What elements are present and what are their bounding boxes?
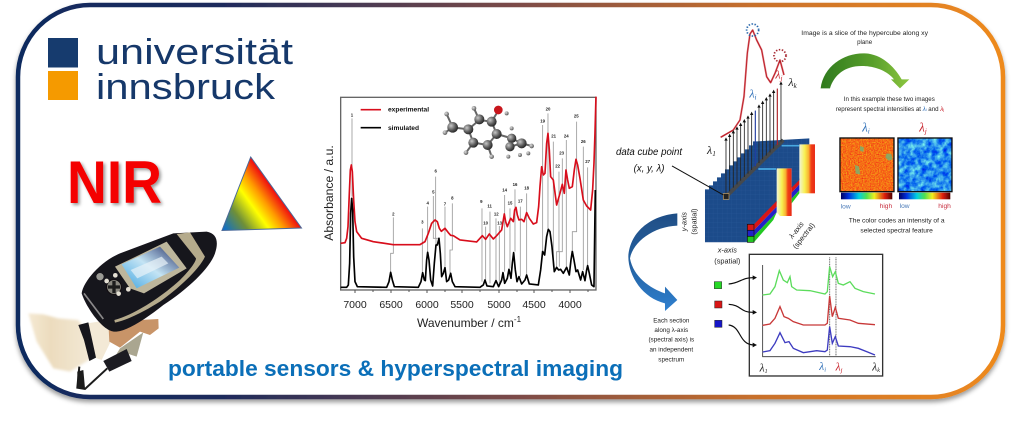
caption: example: In this example these two images [844,96,935,103]
front RGB bands [747,201,777,242]
keypad [96,273,131,296]
icon: spectrum triangle [222,157,302,230]
colour bar labels: low [841,204,851,211]
caption: sections: spectrum [658,356,684,363]
peak numbers: 5 [432,190,435,195]
wrist band [78,322,96,361]
peak numbers: 9 [480,199,483,204]
screen [122,247,179,288]
back slice RGB bands [792,178,799,203]
data cube point marker [723,194,729,199]
x tick labels: 5500 [450,299,474,311]
x tick labels: 6000 [415,299,439,311]
intensity map lambda j [898,138,952,192]
caption: colour codes: selected spectral feature [860,227,933,234]
map titles: j [924,127,927,136]
spectra axis labels: 1 [765,369,768,375]
peak numbers: 27 [585,159,591,164]
spectra axis labels [759,361,880,375]
hypercube diagram [616,24,952,251]
map titles: λ [862,121,868,135]
spectra axis labels: k [877,368,880,374]
swatch arrows [729,278,753,345]
bezel [115,242,187,293]
beige band [114,232,205,323]
legend [361,107,429,132]
spectra axis labels: λ [836,361,841,373]
peak numbers [351,107,591,226]
peak numbers: 10 [483,221,489,226]
lambda-axis label: (spectral) [791,221,817,251]
arrow heads [724,81,783,141]
simulated spectrum [341,190,595,287]
screen panel [131,257,168,278]
strap [77,367,107,389]
y-axis label: (spatial) [690,209,699,235]
map titles: i [868,127,870,136]
lambda labels: λ [788,75,794,89]
spectra section [628,213,883,376]
handle [115,332,143,357]
spectra axis labels: i [824,367,826,374]
lambda labels: j [780,73,783,82]
spectra axis labels: λ [819,361,824,373]
peak numbers: 14 [502,187,508,192]
blue curved arrow [628,213,677,311]
legend: experimental [388,107,429,114]
x tick labels: 6500 [379,299,403,311]
peak numbers: 12 [494,211,499,216]
lambda-axis label: λ-axis [786,220,806,241]
peak numbers: 7 [444,201,447,206]
plot frame [341,97,596,290]
chart: NIR spectrum [322,97,596,330]
spectrum above cube [721,30,784,137]
caption: slice: plane [857,39,873,46]
university logo: universität [96,31,293,72]
colour bar j [899,193,950,199]
caption: example [836,96,944,113]
cube body [705,138,809,242]
spectra panel [714,254,883,376]
spectra axis labels: j [840,367,843,374]
peak numbers: 20 [546,107,551,112]
peak numbers: 8 [451,195,454,200]
tagline: portable sensors & hyperspectral imaging [168,356,623,381]
lambda labels: i [755,92,757,101]
peak numbers: 3 [421,220,424,225]
peak numbers: 17 [518,199,523,204]
peak numbers: 24 [564,133,569,138]
peak numbers: 15 [508,201,513,206]
caption: sections: (spectral axis) is [648,337,694,344]
peak numbers: 2 [392,211,395,216]
intensity map lambda i [840,138,894,192]
peak numbers: 11 [487,204,493,209]
x axis title: Wavenumber / cm [417,316,514,330]
peak numbers: 18 [524,185,530,190]
caption: sections: an independent [650,347,693,354]
caption: colour codes [849,218,945,234]
NIR heading: NIR [67,149,162,216]
peak numbers: 13 [497,220,503,225]
lambda labels [706,67,798,158]
spectra axis labels: λ [760,362,765,374]
back colour strip [799,144,815,193]
lambda labels: λ [749,86,755,100]
caption: sections: Each section [653,317,690,324]
cyan slice edges [758,146,799,169]
peak numbers: 19 [540,118,546,123]
leader lines [352,113,588,283]
lambda i and j arrow highlights [754,111,757,166]
x ticks [355,290,588,293]
y-axis label: y-axis [680,212,689,232]
x tick labels: 5000 [487,299,511,311]
left edge bevel [84,293,103,319]
x axis title: -1 [514,315,522,324]
wavelength arrows [726,84,781,195]
peak numbers: 1 [351,112,354,117]
cuff [87,320,111,360]
caption: example: represent spectral intensities at λi and λj [836,106,944,113]
caption: sections: along λ-axis [654,327,688,334]
peak numbers: 22 [555,164,561,169]
x-axis label [714,245,740,266]
handle grip [103,349,132,372]
data cube point label: data cube point [616,147,683,158]
handheld NIR sensor photo [28,232,217,389]
colour bar labels: high [938,203,951,210]
peak numbers: 16 [513,182,518,187]
lambda labels: λ [775,67,781,81]
caption: colour codes: The color codes an intensity of a [849,218,945,225]
lambda labels: 1 [712,149,716,158]
x tick labels: 4500 [522,299,546,311]
peak numbers: 25 [574,113,579,118]
peak numbers: 4 [426,201,429,206]
x tick labels [343,299,582,311]
peak marker red [774,50,786,62]
cube in zoomed cube coordinates [705,138,815,242]
peak numbers: 6 [434,168,437,173]
university logo [48,31,293,107]
molecule model [443,106,534,159]
peak numbers: 21 [551,133,557,138]
caption: slice: Image is a slice of the hypercube along xy [801,30,929,37]
caption: slice [801,30,929,46]
peak numbers: 26 [581,139,586,144]
colour swatches [714,282,722,289]
colour bar labels: high [880,203,893,210]
caption: sections [648,317,694,363]
green curved arrow [821,53,909,88]
data cube point label: (x, y, λ) [634,164,664,175]
plot area in zoomed coordinates [341,97,596,290]
lambda labels: k [794,81,798,90]
colour bar i [841,193,892,199]
y axis title: Absorbance / a.u. [322,145,336,241]
colour bar labels [841,203,951,211]
data cube pointer [672,166,723,195]
map titles: λ [919,121,925,135]
data cube point label [616,147,683,175]
experimental spectrum [341,97,596,245]
university logo: innsbruck [96,66,276,107]
x-axis label: (spatial) [714,257,740,266]
spectra axis labels: λ [872,361,877,373]
x-axis label: x-axis [717,245,737,254]
legend: simulated [388,125,419,132]
palm [108,319,159,348]
spectral depth band [726,140,783,197]
device body [82,232,217,332]
lambda labels: λ [707,143,712,157]
peak marker blue [747,24,759,36]
colour bar labels: low [900,203,910,210]
map titles [861,121,927,136]
x tick labels: 4000 [558,299,582,311]
x tick labels: 7000 [343,299,367,311]
peak numbers: 23 [559,151,565,156]
hand and sleeve [28,313,92,372]
front colour strip [777,168,792,216]
